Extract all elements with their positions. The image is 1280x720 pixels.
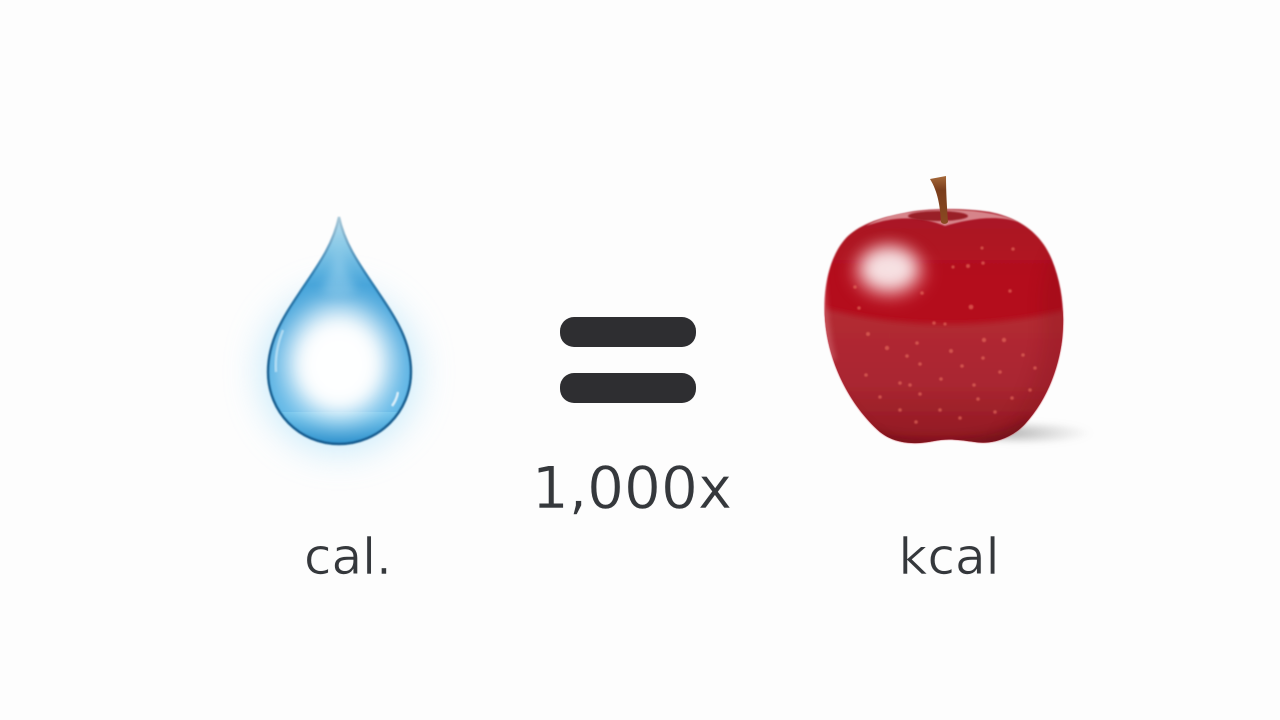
- apple speckles: [853, 246, 1037, 424]
- apple shadow: [968, 423, 1092, 443]
- drop glow: [261, 292, 417, 452]
- label: 1,000x: 1,000x: [532, 454, 732, 522]
- apple stem: [930, 176, 948, 224]
- icon: red apple: [824, 176, 1078, 444]
- drop interior shading: [269, 254, 410, 440]
- label: cal: cal.: [304, 528, 392, 586]
- icon: equals sign: [560, 317, 696, 403]
- apple body: [825, 209, 1063, 443]
- drop body: [268, 217, 411, 444]
- icon: water drop: [261, 217, 418, 452]
- drop outline: [268, 217, 411, 444]
- label: kcal: kcal: [899, 528, 999, 586]
- apple surface shading: [824, 210, 1064, 444]
- apple highlight: [849, 242, 929, 302]
- apple dimple: [866, 210, 1018, 226]
